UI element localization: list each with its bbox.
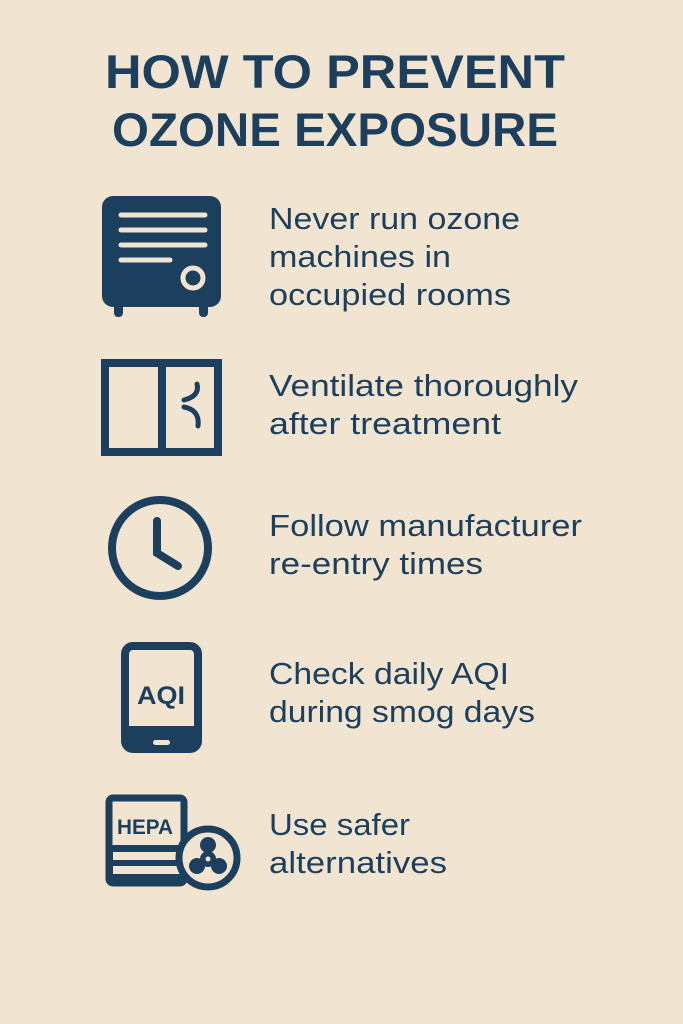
text: never run: occupied rooms <box>269 277 511 312</box>
text: safer alternatives <box>269 807 447 880</box>
text: follow: re-entry times <box>269 546 483 581</box>
title: HOW TO PREVENT <box>105 45 565 98</box>
title: OZONE EXPOSURE <box>112 103 558 156</box>
text: check AQI <box>269 656 535 729</box>
text: never run: machines in <box>269 239 451 274</box>
text: never run: Never run ozone <box>269 201 520 236</box>
icon: HEPA fan <box>109 798 237 887</box>
text: ventilate: Ventilate thoroughly <box>269 368 579 403</box>
text: never run <box>269 201 520 312</box>
icon: ozone machine <box>102 196 221 317</box>
text: ventilate: after treatment <box>269 406 501 441</box>
icon: window <box>105 363 218 452</box>
text: ventilate <box>269 368 579 441</box>
icon: HEPA fan: HEPA <box>117 816 173 839</box>
text: check AQI: Check daily AQI <box>269 656 509 691</box>
text: follow: Follow manufacturer <box>269 508 582 543</box>
icon: clock <box>112 500 208 596</box>
text: follow <box>269 508 582 581</box>
title <box>105 45 565 156</box>
text: safer alternatives: Use safer <box>269 807 410 842</box>
icon: phone AQI: AQI <box>137 682 185 710</box>
text: safer alternatives: alternatives <box>269 845 447 880</box>
icon: phone AQI <box>125 646 198 749</box>
text: check AQI: during smog days <box>269 694 535 729</box>
